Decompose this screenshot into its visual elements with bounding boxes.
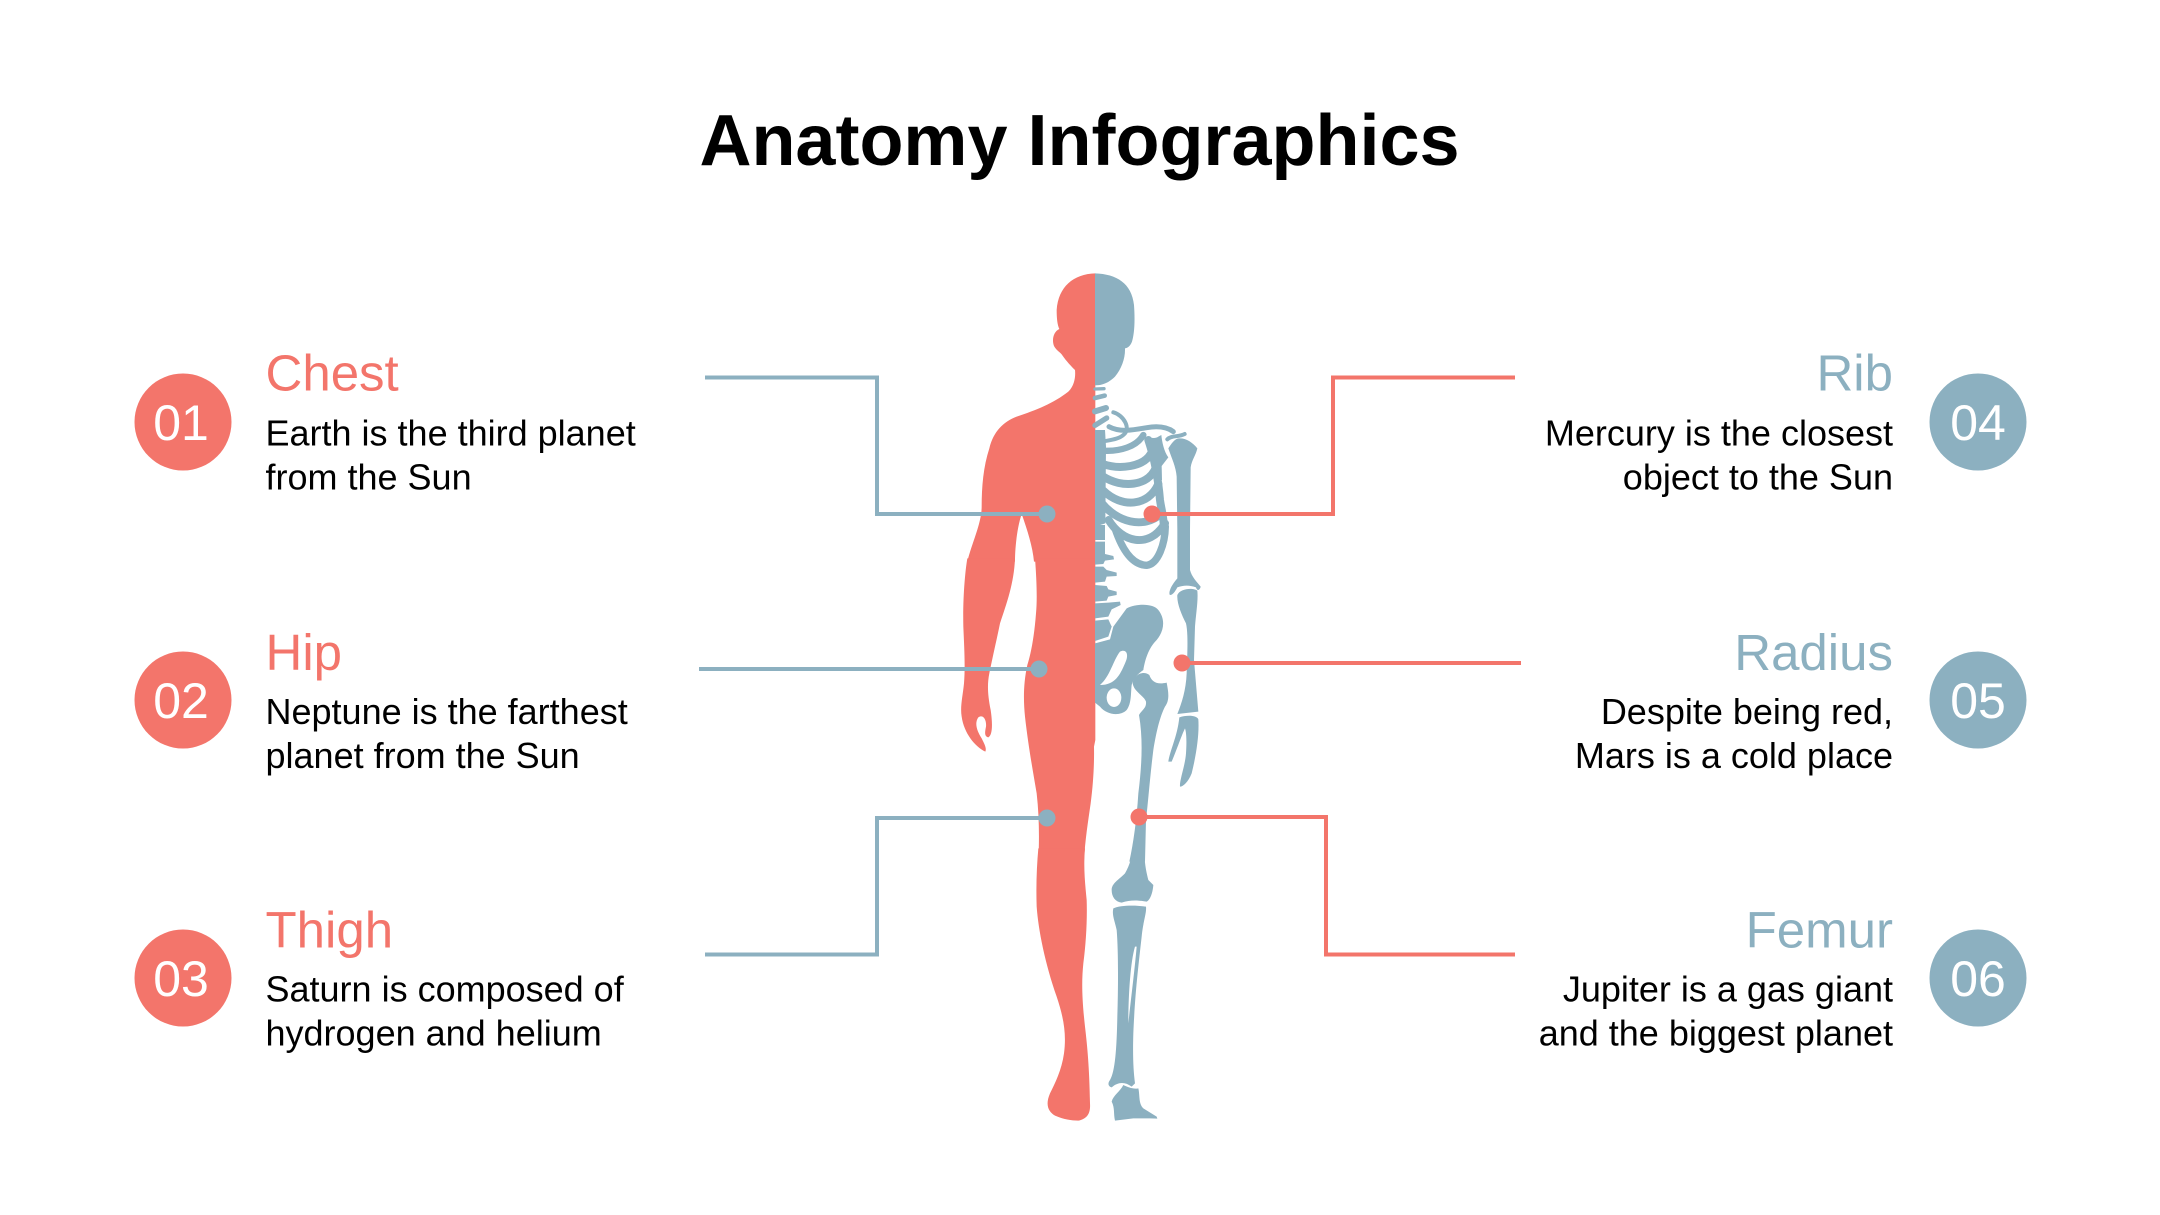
item 02: hip: [134, 624, 628, 776]
title: Anatomy Infographics: [699, 101, 1460, 181]
item 03: thigh: 03: [153, 951, 209, 1007]
connector: hip: [699, 660, 1048, 678]
item 06: femur: [1539, 902, 2026, 1054]
item 02: hip: Neptune is the farthest: [266, 691, 628, 732]
connector: thigh: [705, 810, 1056, 954]
shoulder blade: [1145, 435, 1168, 480]
connector: chest: [705, 378, 1056, 522]
item 05: radius: Radius: [1734, 624, 1893, 681]
item 05: radius: Despite being red,: [1601, 691, 1893, 732]
spine, pelvis and forearm: [1095, 525, 1199, 862]
item 06: femur: and the biggest planet: [1539, 1012, 1893, 1054]
item 03: thigh: Thigh: [266, 902, 393, 958]
item 04: rib: Mercury is the closest: [1545, 412, 1893, 454]
item 04: rib: Rib: [1816, 344, 1893, 402]
item 01: chest: from the Sun: [266, 456, 472, 498]
item 05: radius: Mars is a cold place: [1575, 735, 1893, 776]
item 01: chest: Chest: [266, 344, 399, 402]
lower leg bones: [1108, 847, 1157, 1121]
hand bones: [1168, 716, 1199, 787]
item 03: thigh: [134, 902, 625, 1054]
item 02: hip: planet from the Sun: [266, 735, 580, 776]
item 06: femur: 06: [1950, 951, 2006, 1007]
item 05: radius: 05: [1950, 673, 2006, 729]
rib cage and shoulder: [1095, 389, 1201, 595]
human body silhouette: [961, 273, 1095, 1121]
radius and ulna: [1177, 589, 1198, 714]
item 02: hip: 02: [153, 673, 209, 729]
human skeleton: [1095, 273, 1201, 1121]
humerus: [1168, 438, 1201, 595]
pelvis: [1095, 605, 1163, 714]
item 01: chest: Earth is the third planet: [266, 412, 636, 454]
item 03: thigh: hydrogen and helium: [266, 1012, 602, 1054]
item 06: femur: Femur: [1746, 902, 1893, 958]
item 01: chest: [134, 344, 636, 498]
connector: radius: [1174, 654, 1521, 672]
item 04: rib: 04: [1950, 395, 2006, 451]
item 06: femur: Jupiter is a gas giant: [1563, 968, 1893, 1010]
item 01: chest: 01: [153, 395, 209, 451]
skull: [1095, 273, 1135, 385]
femur upper: [1129, 673, 1168, 862]
item 04: rib: object to the Sun: [1623, 456, 1893, 498]
item 04: rib: [1545, 344, 2026, 498]
item 03: thigh: Saturn is composed of: [266, 968, 625, 1010]
item 02: hip: Hip: [266, 624, 342, 681]
item 05: radius: [1575, 624, 2026, 776]
connector: femur: [1130, 808, 1515, 954]
connector: rib: [1144, 378, 1515, 522]
